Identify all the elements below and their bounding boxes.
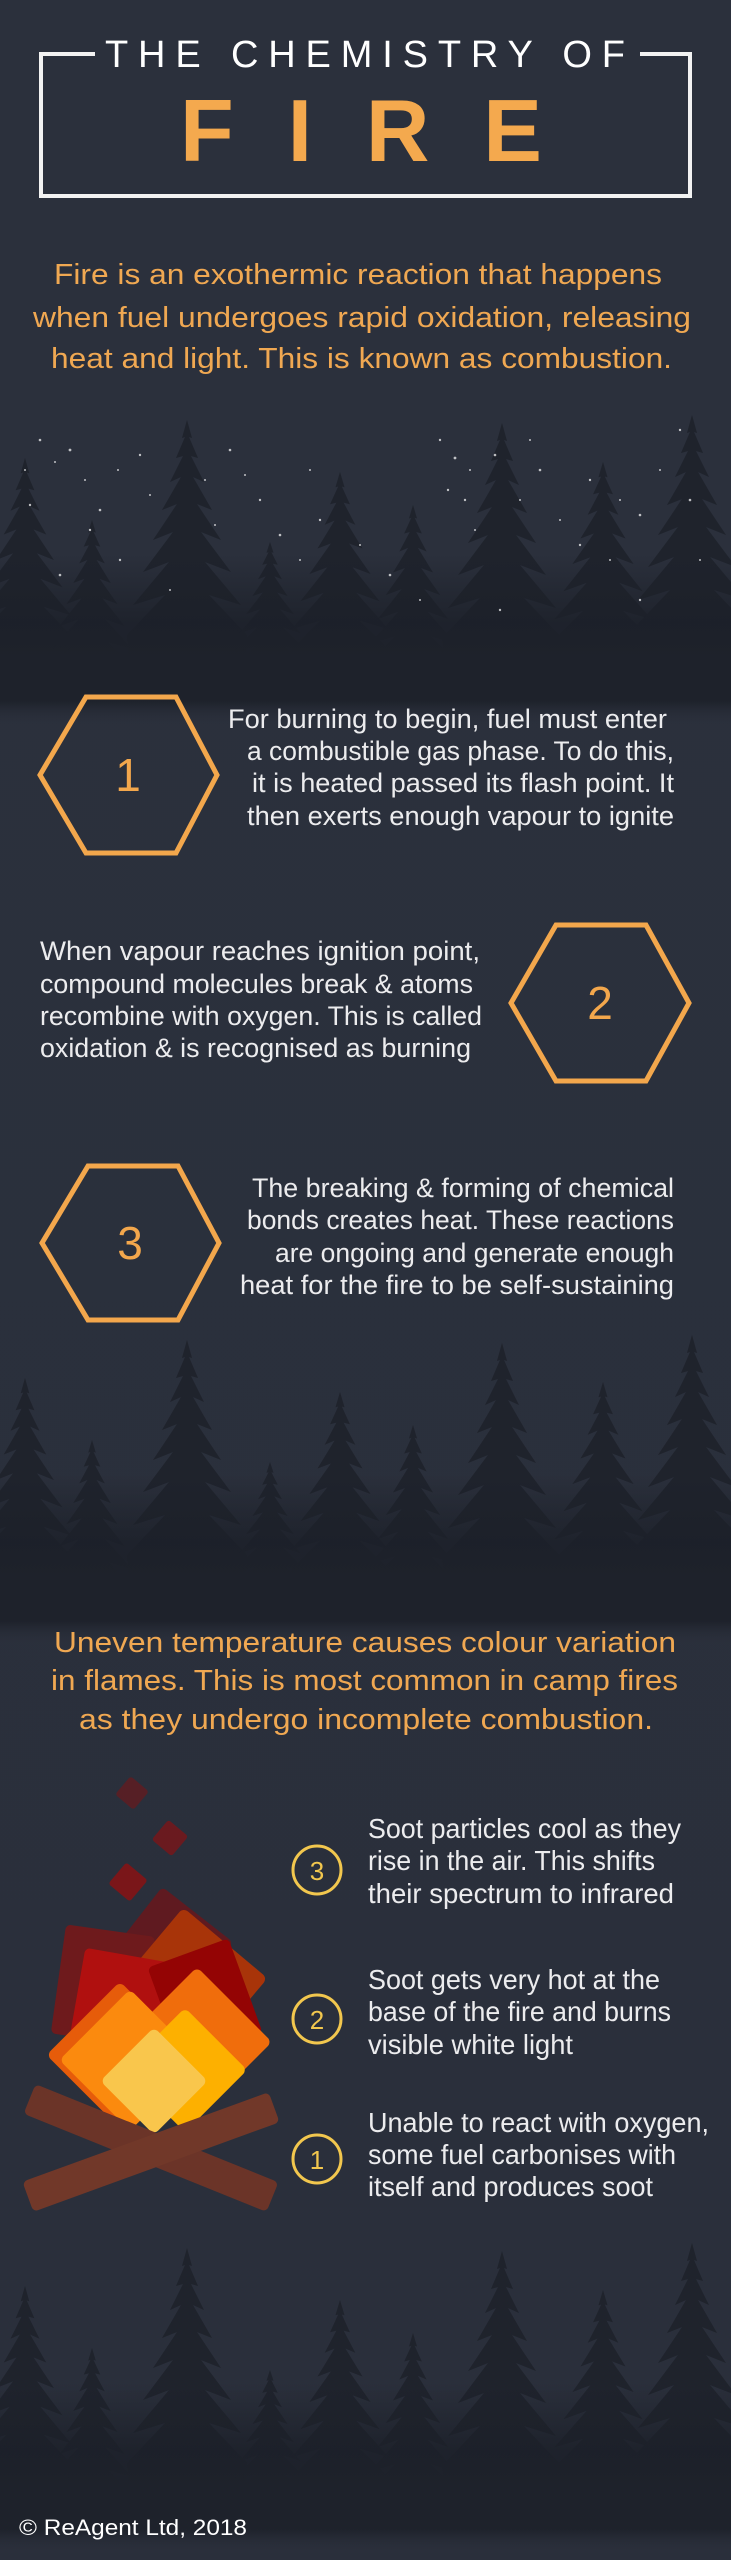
step 3 text: are ongoing and generate enough — [275, 1238, 674, 1268]
fire explanation list — [293, 1813, 709, 2202]
trees band: bottom — [0, 2243, 731, 2553]
item 3: 3 — [310, 1856, 324, 1886]
hexagon 2: 2 — [587, 977, 613, 1029]
step 1 text: a combustible gas phase. To do this, — [247, 736, 674, 766]
item 3: rise in the air. This shifts — [368, 1845, 655, 1876]
campfire illustration — [22, 1776, 280, 2212]
flames intro text: in flames. This is most common in camp fires — [51, 1665, 678, 1697]
flames intro text: Uneven temperature causes colour variation — [54, 1627, 676, 1659]
item 1: some fuel carbonises with — [368, 2139, 676, 2170]
hexagon 3: 3 — [117, 1217, 143, 1269]
item 1: Unable to react with oxygen, — [368, 2107, 709, 2138]
step 2 text: recombine with oxygen. This is called — [40, 1001, 482, 1031]
item 1: itself and produces soot — [368, 2171, 653, 2202]
item 2: visible white light — [368, 2029, 573, 2060]
step 3 text: heat for the fire to be self-sustaining — [240, 1270, 674, 1300]
step 2 — [40, 925, 689, 1081]
logs — [22, 2084, 280, 2212]
title frame — [41, 34, 690, 196]
step 2 text: oxidation & is recognised as burning — [40, 1033, 471, 1063]
hexagon 1: 1 — [115, 749, 141, 801]
copyright: © ReAgent Ltd, 2018 — [19, 2515, 247, 2540]
step 3 text: bonds creates heat. These reactions — [247, 1205, 674, 1235]
intro text — [32, 259, 691, 375]
step 1 text: it is heated passed its flash point. It — [252, 768, 674, 798]
item 2: base of the fire and burns — [368, 1996, 671, 2027]
item 1: 1 — [310, 2145, 324, 2175]
item 2 — [293, 1964, 671, 2060]
step 2 text — [40, 936, 482, 1063]
intro text: Fire is an exothermic reaction that happens — [54, 259, 662, 291]
item 3: their spectrum to infrared — [368, 1878, 674, 1909]
title: fire: FIRE — [180, 81, 542, 180]
item 2: 2 — [310, 2005, 324, 2035]
flames intro text — [51, 1627, 678, 1736]
item 3: Soot particles cool as they — [368, 1813, 681, 1844]
embers — [108, 1776, 188, 1902]
step 1 text: then exerts enough vapour to ignite — [247, 801, 674, 831]
title: the chemistry of: THE CHEMISTRY OF — [105, 34, 625, 76]
hexagon 1 — [40, 697, 217, 853]
snow particles — [24, 429, 701, 611]
step 3 — [42, 1166, 674, 1320]
step 1 text — [228, 704, 674, 831]
intro text: heat and light. This is known as combustion. — [51, 343, 672, 375]
flames — [46, 1887, 272, 2135]
step 2 text: compound molecules break & atoms — [40, 969, 473, 999]
trees band: top — [0, 415, 731, 725]
step 1 — [40, 697, 674, 853]
step 2 text: When vapour reaches ignition point, — [40, 936, 480, 966]
item 1 — [293, 2107, 709, 2202]
step 3 text: The breaking & forming of chemical — [252, 1173, 674, 1203]
flames intro text: as they undergo incomplete combustion. — [79, 1704, 653, 1736]
intro text: when fuel undergoes rapid oxidation, releasing — [32, 302, 691, 334]
hexagon 2 — [511, 925, 689, 1081]
step 3 text — [240, 1173, 674, 1300]
step 1 text: For burning to begin, fuel must enter — [228, 704, 667, 734]
hexagon 3 — [42, 1166, 219, 1320]
trees band: middle — [0, 1335, 731, 1645]
item 2: Soot gets very hot at the — [368, 1964, 660, 1995]
item 3 — [293, 1813, 681, 1909]
